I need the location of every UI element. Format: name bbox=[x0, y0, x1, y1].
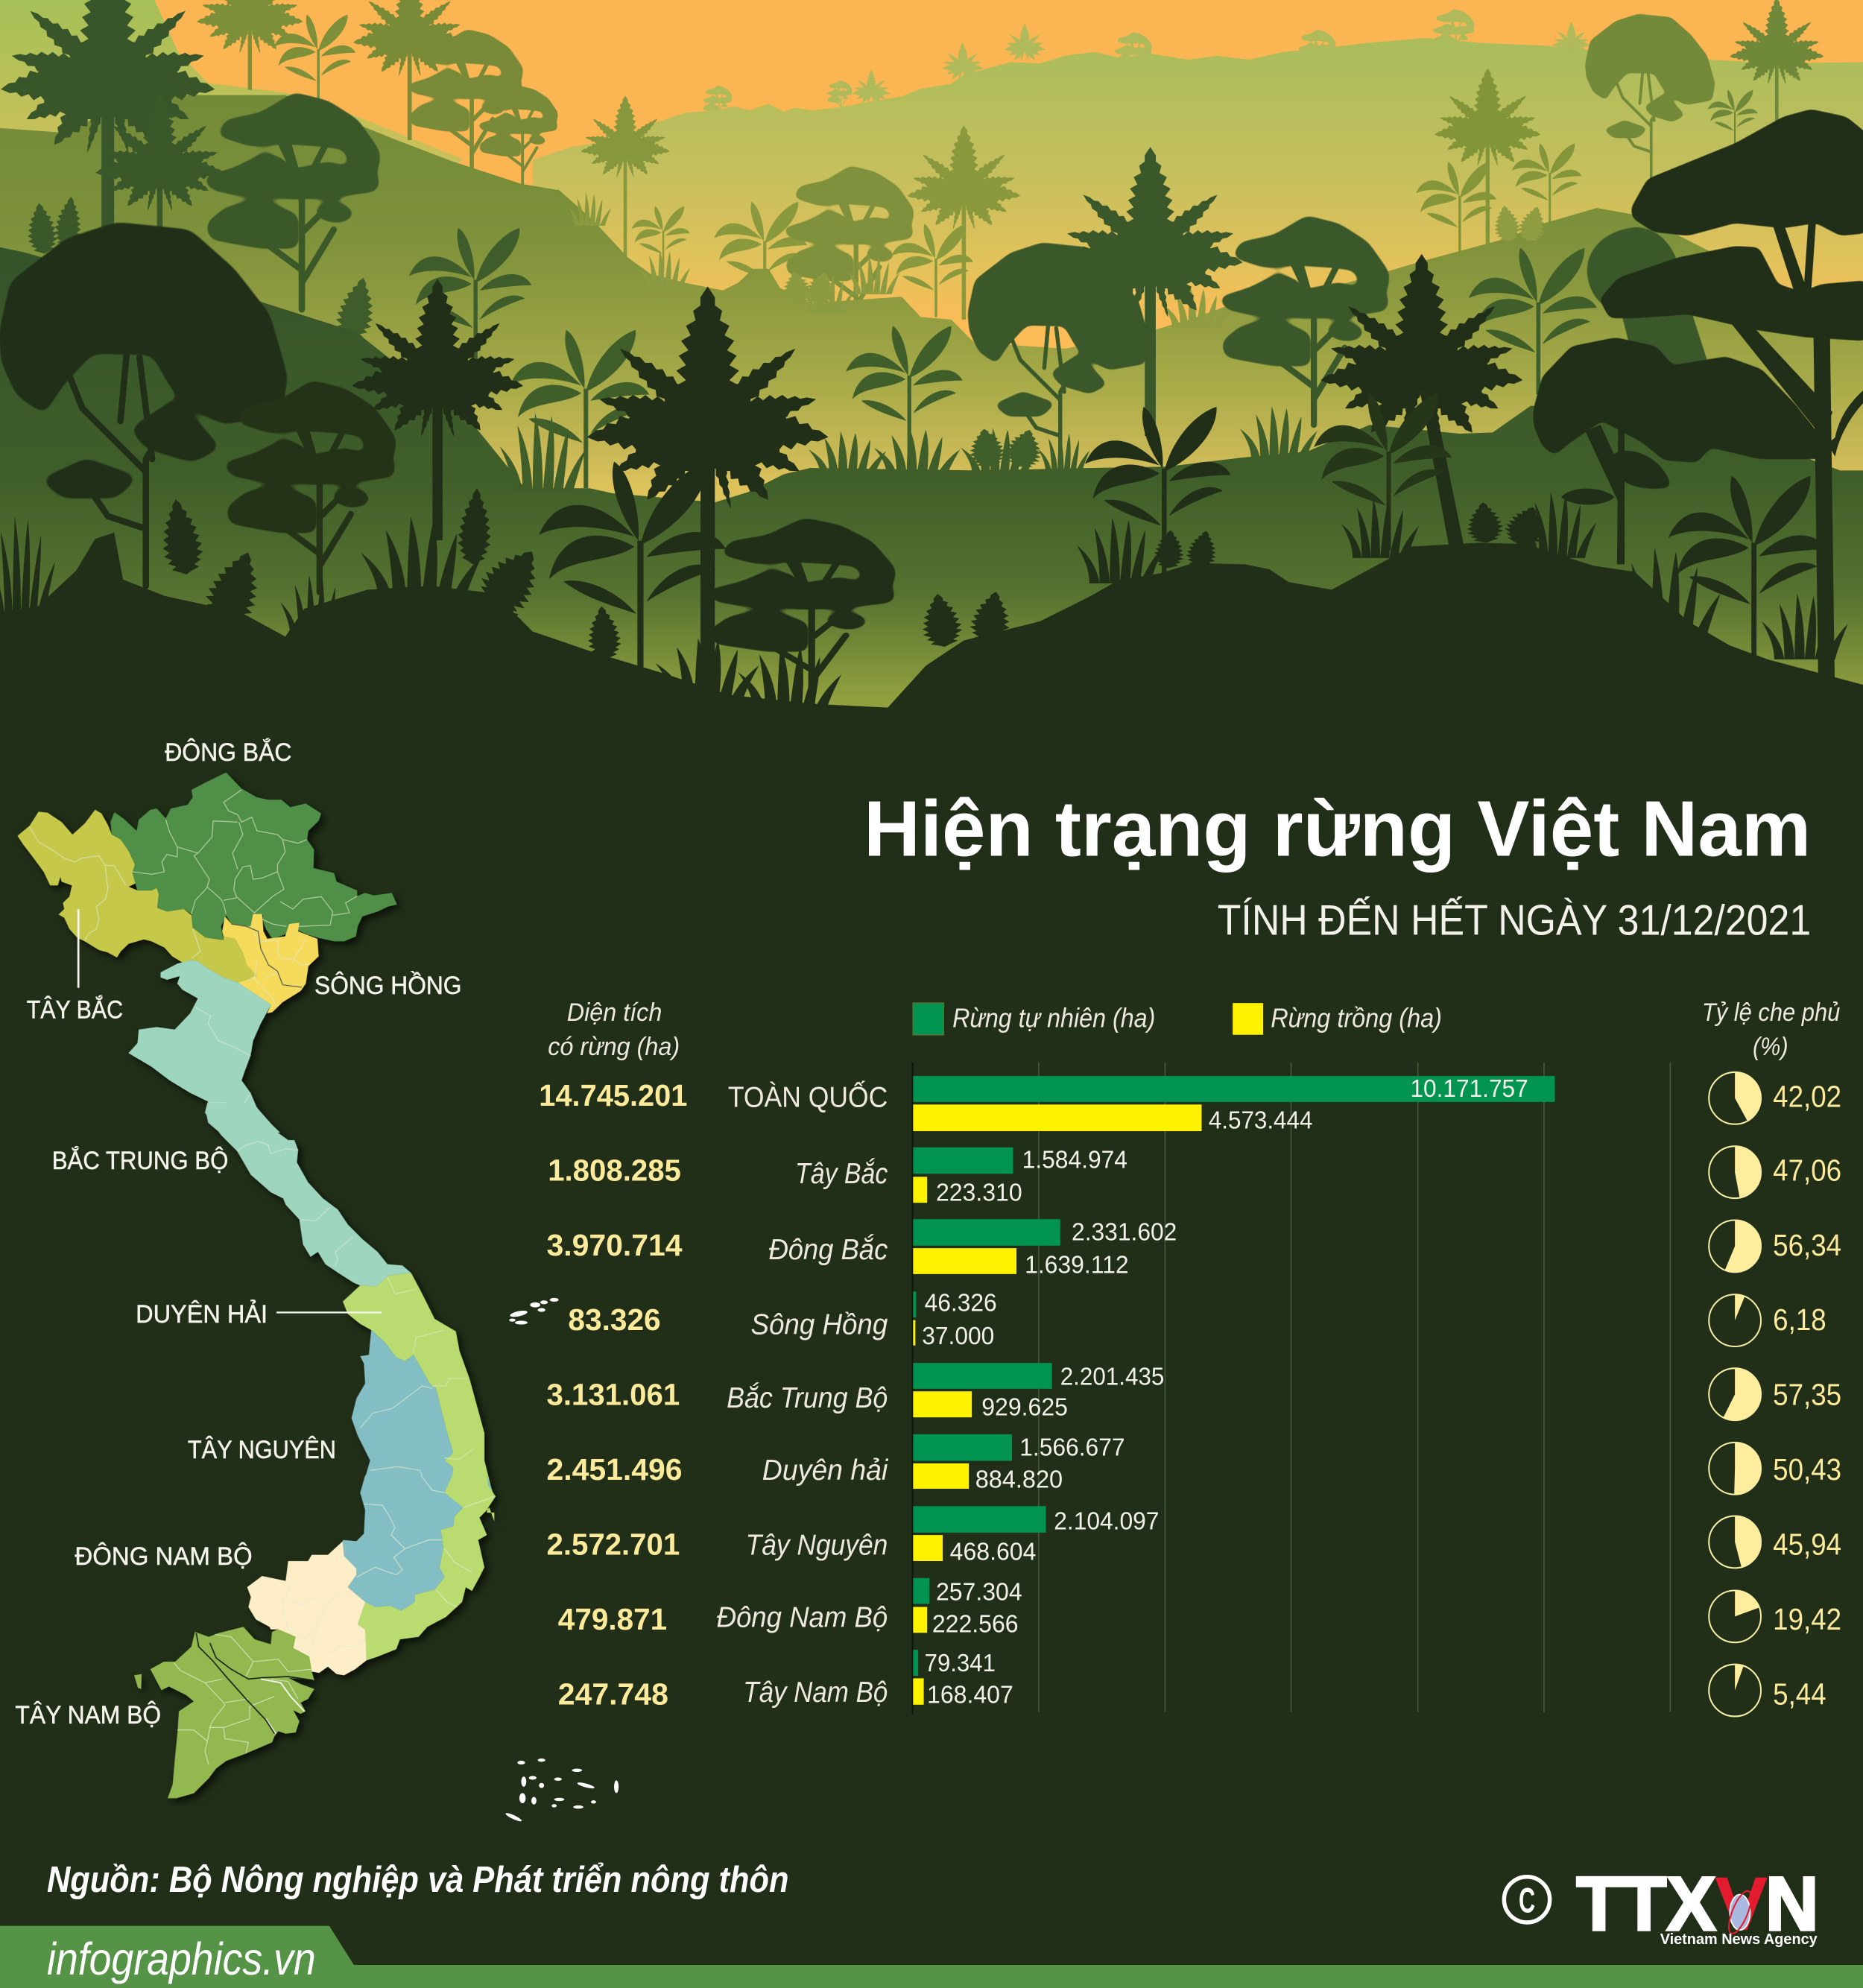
bar values: 257.304 bbox=[936, 1579, 1022, 1606]
region: Duyên hải south part bbox=[358, 1475, 496, 1660]
legend: Rừng tự nhiên (ha) bbox=[952, 1004, 1155, 1033]
legend bbox=[913, 1003, 1442, 1035]
column header: coverage: (%) bbox=[1753, 1033, 1788, 1061]
bar values: 10.171.757 bbox=[1410, 1075, 1528, 1103]
region row labels bbox=[717, 1080, 889, 1709]
region: Đông Bắc bbox=[110, 773, 397, 941]
column header: forest area: Diện tích bbox=[567, 998, 662, 1027]
coverage percent values: 6,18 bbox=[1773, 1302, 1826, 1337]
region row labels: Bắc Trung Bộ bbox=[727, 1382, 888, 1414]
map region labels: ĐÔNG NAM BỘ bbox=[75, 1542, 253, 1571]
top left dark palms bbox=[0, 0, 226, 255]
forest area values: 479.871 bbox=[558, 1602, 667, 1636]
bar values: 46.326 bbox=[925, 1290, 997, 1317]
bar values bbox=[922, 1075, 1528, 1709]
coverage percent values: 45,94 bbox=[1773, 1527, 1841, 1561]
region row labels: Đông Bắc bbox=[768, 1234, 888, 1266]
top left olive trees bbox=[195, 0, 558, 184]
leader line: Duyên hải bbox=[276, 1311, 382, 1314]
hill grass bbox=[500, 406, 1318, 492]
forest area values: 2.572.701 bbox=[546, 1527, 680, 1561]
forest area values: 14.745.201 bbox=[539, 1078, 687, 1112]
bar values: 79.341 bbox=[925, 1650, 996, 1677]
map region labels bbox=[15, 738, 461, 1729]
foreground leaves and grass bbox=[0, 487, 1848, 710]
forest area values: 3.970.714 bbox=[546, 1228, 683, 1262]
copyright symbol bbox=[1504, 1877, 1550, 1922]
province borders south bbox=[174, 1475, 494, 1764]
map region labels: TÂY NGUYÊN bbox=[188, 1436, 336, 1464]
column header: coverage bbox=[1702, 998, 1840, 1061]
column header: forest area bbox=[548, 998, 680, 1061]
foreground dark trees bbox=[0, 222, 1525, 704]
province borders north bbox=[30, 790, 357, 1107]
forest area values: 3.131.061 bbox=[546, 1378, 680, 1412]
legend: Rừng trồng (ha) bbox=[1271, 1004, 1442, 1033]
bar values: 2.104.097 bbox=[1054, 1507, 1159, 1535]
hillside canopy tree and banana plant bbox=[202, 92, 531, 368]
forest area values: 1.808.285 bbox=[548, 1153, 681, 1187]
map region labels: SÔNG HỒNG bbox=[314, 972, 461, 1000]
yellow bars bbox=[913, 1104, 1201, 1705]
map region labels: TÂY NAM BỘ bbox=[15, 1701, 161, 1729]
far ridge trees bbox=[703, 9, 1590, 121]
region: Duyên hải north part bbox=[343, 1273, 492, 1490]
sky bbox=[0, 0, 1863, 710]
region: Tây Nguyên north part bbox=[352, 1330, 453, 1490]
coverage percent values: 57,35 bbox=[1773, 1378, 1841, 1412]
region: Bắc Trung Bộ north part bbox=[128, 960, 280, 1133]
island group: Trường Sa bbox=[505, 1759, 619, 1823]
TTXVN logo bbox=[1576, 1861, 1818, 1948]
bar values: 929.625 bbox=[981, 1393, 1068, 1421]
green front hills bbox=[0, 247, 1863, 723]
coverage percent values: 56,34 bbox=[1773, 1228, 1841, 1262]
bar values: 222.566 bbox=[932, 1610, 1019, 1638]
map region labels: ĐÔNG BẮC bbox=[165, 738, 291, 767]
hill-top grass and small plants bbox=[568, 193, 1550, 327]
region: Đông Nam Bộ bbox=[247, 1541, 367, 1675]
region row labels: Tây Nam Bộ bbox=[743, 1677, 888, 1709]
coverage percent values bbox=[1773, 1080, 1841, 1711]
region: Sông Hồng bbox=[222, 914, 319, 1013]
coverage percent values: 47,06 bbox=[1773, 1153, 1841, 1187]
footer band bbox=[0, 1926, 1863, 1988]
bar values: 2.331.602 bbox=[1072, 1218, 1177, 1246]
Phú Quốc island bbox=[134, 1674, 142, 1689]
bar chart bbox=[913, 1063, 1670, 1715]
region: Bắc Trung Bộ south part bbox=[205, 1103, 411, 1287]
bar values: 1.639.112 bbox=[1025, 1252, 1129, 1279]
source line: Nguồn: Bộ Nông nghiệp và Phát triển nông thôn bbox=[47, 1859, 789, 1900]
TTXVN logo: TTX bbox=[1576, 1861, 1716, 1946]
map: north bbox=[17, 773, 397, 1133]
title: Hiện trạng rừng Việt Nam bbox=[864, 785, 1811, 873]
TTXVN logo: Vietnam News Agency bbox=[1660, 1931, 1818, 1948]
bar values: 1.566.677 bbox=[1019, 1434, 1125, 1462]
copyright symbol: C bbox=[1519, 1881, 1535, 1920]
subtitle: TÍNH ĐẾN HẾT NGÀY 31/12/2021 bbox=[1218, 896, 1811, 944]
website: infographics.vn bbox=[47, 1934, 316, 1984]
forest area values bbox=[539, 1078, 687, 1711]
region row labels: TOÀN QUỐC bbox=[728, 1080, 888, 1114]
map region labels: TÂY BẮC bbox=[27, 996, 123, 1025]
bar values: 37.000 bbox=[922, 1323, 994, 1350]
valley olive trees bbox=[580, 95, 1022, 326]
region row labels: Tây Bắc bbox=[795, 1158, 888, 1190]
map region labels: DUYÊN HẢI bbox=[136, 1300, 268, 1329]
valley dark trees bbox=[510, 147, 1711, 488]
region: Tây Bắc bbox=[17, 810, 257, 982]
green bars bbox=[913, 1076, 1554, 1676]
map: south bbox=[134, 1475, 496, 1798]
TTXVN logo: V bbox=[1715, 1861, 1768, 1946]
dark foreground ground bbox=[0, 533, 1863, 811]
column header: forest area: có rừng (ha) bbox=[548, 1033, 680, 1061]
leader line: Tây Bắc bbox=[78, 909, 80, 988]
coverage percent values: 42,02 bbox=[1773, 1080, 1841, 1114]
bar values: 2.201.435 bbox=[1060, 1363, 1164, 1390]
light green background hill bbox=[0, 0, 464, 228]
region row labels: Duyên hải bbox=[762, 1454, 889, 1487]
map of Vietnam bbox=[17, 773, 496, 1798]
province borders centre bbox=[237, 1142, 475, 1490]
middle hills bbox=[0, 95, 1863, 533]
forest area values: 2.451.496 bbox=[546, 1452, 683, 1487]
region: Tây Nam Bộ bbox=[151, 1627, 314, 1798]
coverage pie charts bbox=[1709, 1072, 1761, 1716]
bar values: 1.584.974 bbox=[1022, 1146, 1127, 1174]
region row labels: Đông Nam Bộ bbox=[717, 1601, 888, 1633]
coverage percent values: 19,42 bbox=[1773, 1602, 1841, 1636]
coverage percent values: 5,44 bbox=[1773, 1677, 1826, 1711]
bar values: 223.310 bbox=[936, 1180, 1022, 1207]
region: Tây Nguyên south part bbox=[343, 1475, 494, 1611]
bar values: 884.820 bbox=[975, 1466, 1063, 1493]
map: centre bbox=[205, 1103, 492, 1490]
forest area values: 247.748 bbox=[558, 1677, 668, 1711]
bar values: 168.407 bbox=[927, 1682, 1013, 1709]
TTXVN logo: N bbox=[1765, 1861, 1818, 1946]
column header: coverage: Tỷ lệ che phủ bbox=[1702, 998, 1840, 1027]
map region labels: BẮC TRUNG BỘ bbox=[52, 1147, 228, 1175]
region row labels: Sông Hồng bbox=[750, 1308, 888, 1340]
giant right tree bbox=[1534, 109, 1863, 710]
island group: Hoàng Sa bbox=[509, 1298, 559, 1325]
bar values: 468.604 bbox=[950, 1538, 1036, 1566]
forest illustration bbox=[0, 0, 1863, 811]
bar values: 4.573.444 bbox=[1209, 1107, 1312, 1135]
region row labels: Tây Nguyên bbox=[746, 1529, 888, 1561]
right side olive trees bbox=[1416, 0, 1825, 253]
forest area values: 83.326 bbox=[568, 1302, 661, 1337]
coverage percent values: 50,43 bbox=[1773, 1452, 1841, 1487]
far ridge hill bbox=[533, 38, 1863, 558]
